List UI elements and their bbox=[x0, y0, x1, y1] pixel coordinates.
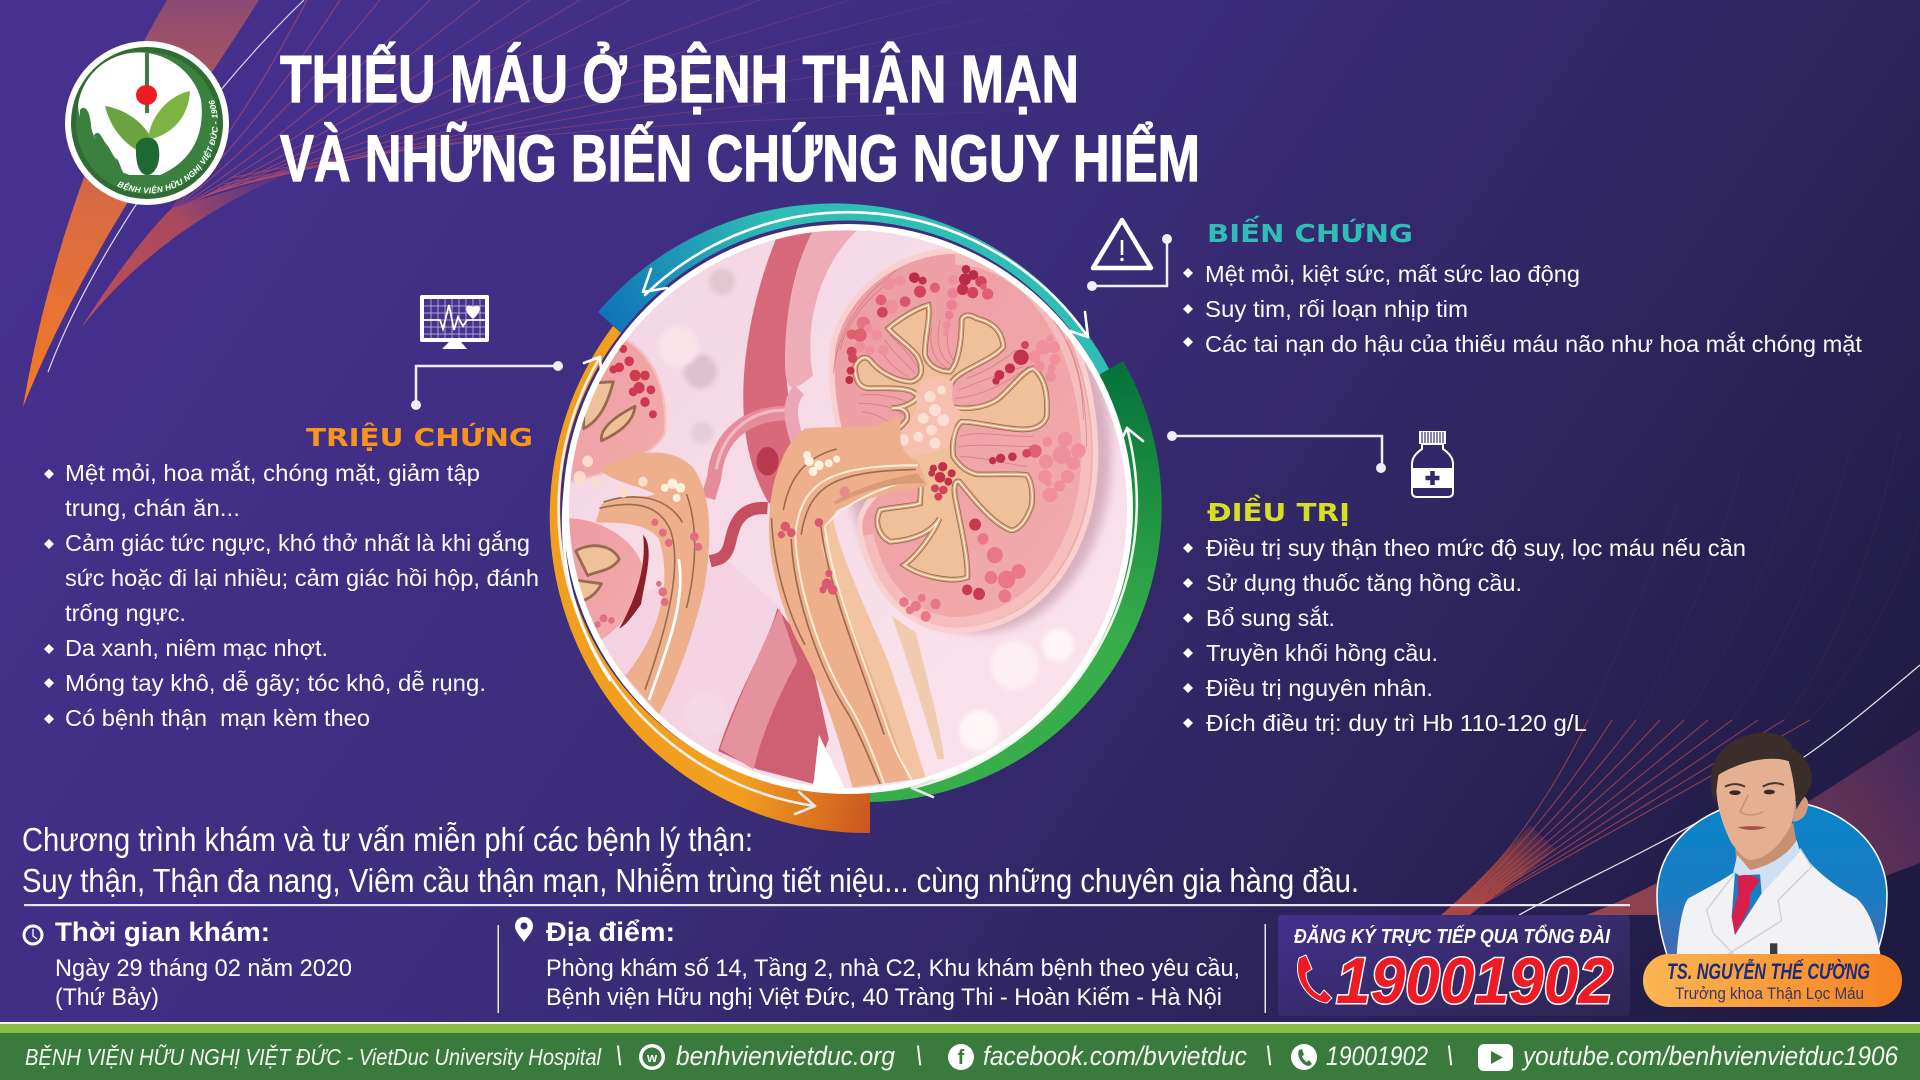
treatment list: Bổ sung sắt. bbox=[1206, 605, 1335, 631]
heading: treatment: ĐIỀU TRỊ bbox=[1207, 494, 1350, 527]
hospital logo bbox=[65, 41, 229, 205]
treatment list: Điều trị nguyên nhân. bbox=[1206, 675, 1433, 701]
title: VÀ NHỮNG BIẾN CHỨNG NGUY HIỂM bbox=[280, 121, 1200, 195]
decorative swooshes bottom right bbox=[1441, 430, 1920, 915]
icon: phone bbox=[1291, 1044, 1317, 1070]
left kidney bbox=[568, 337, 665, 482]
symptom list: trung, chán ăn... bbox=[65, 495, 240, 521]
panel: location: Phòng khám số 14, Tầng 2, nhà C2, Khu khám bệnh theo yêu cầu, bbox=[546, 955, 1240, 982]
hotline number: 19001902 bbox=[1336, 944, 1613, 1017]
right kidney bbox=[848, 360, 1116, 637]
complication list: Các tai nạn do hậu của thiếu máu não như hoa mắt chóng mặt bbox=[1205, 331, 1862, 357]
program announcement text: Chương trình khám và tư vấn miễn phí các bệnh lý thận: bbox=[22, 821, 753, 858]
panel: complications bbox=[1087, 215, 1862, 357]
icon: facebook: f bbox=[958, 1047, 965, 1069]
icon: clock bbox=[22, 924, 44, 946]
footer bar: 19001902 bbox=[1326, 1041, 1428, 1071]
symptom list: Cảm giác tức ngực, khó thở nhất là khi gắng bbox=[65, 530, 530, 556]
footer bar: \ bbox=[1265, 1041, 1273, 1071]
symptom list: sức hoặc đi lại nhiều; cảm giác hồi hộp, đánh bbox=[65, 565, 539, 591]
icon: website bbox=[639, 1044, 665, 1070]
central kidney illustration bbox=[560, 220, 1140, 800]
symptom list: Có bệnh thận mạn kèm theo bbox=[65, 705, 370, 731]
heading: complications: BIẾN CHỨNG bbox=[1207, 215, 1413, 248]
doctor portrait bbox=[1657, 733, 1887, 958]
symptom list: Mệt mỏi, hoa mắt, chóng mặt, giảm tập bbox=[65, 460, 480, 486]
treatment list: Đích điều trị: duy trì Hb 110-120 g/L bbox=[1206, 710, 1587, 736]
footer bar: benhvienvietduc.org bbox=[676, 1041, 895, 1071]
symptom list bbox=[44, 460, 539, 731]
doctor name badge bbox=[1643, 954, 1902, 1007]
panel: location: Bệnh viện Hữu nghị Việt Đức, 40 Tràng Thi - Hoàn Kiếm - Hà Nội bbox=[546, 984, 1222, 1011]
symptom list: trống ngực. bbox=[65, 600, 186, 626]
panel: symptoms bbox=[44, 295, 563, 731]
icon: red phone bbox=[1297, 955, 1332, 1003]
symptom list: Da xanh, niêm mạc nhợt. bbox=[65, 635, 328, 661]
title: THIẾU MÁU Ở BỆNH THẬN MẠN bbox=[280, 42, 1079, 117]
panel: exam time bbox=[22, 917, 352, 1011]
complication list: Mệt mỏi, kiệt sức, mất sức lao động bbox=[1205, 261, 1580, 287]
footer bar: \ bbox=[1446, 1041, 1454, 1071]
lower kidney clusters bbox=[899, 518, 1026, 622]
program announcement text bbox=[22, 821, 1359, 899]
treatment list bbox=[1183, 535, 1746, 736]
panel: location: Địa điểm: bbox=[546, 917, 675, 947]
vessels bbox=[743, 231, 813, 504]
title bbox=[280, 42, 1200, 195]
registration hotline box: ĐĂNG KÝ TRỰC TIẾP QUA TỔNG ĐÀI bbox=[1294, 924, 1610, 948]
doctor name badge: Trưởng khoa Thận Lọc Máu bbox=[1675, 984, 1864, 1003]
icon: heart monitor bbox=[420, 295, 489, 349]
icon: facebook bbox=[948, 1044, 974, 1070]
treatment list: Truyền khối hồng cầu. bbox=[1206, 640, 1438, 666]
connector bbox=[1167, 431, 1386, 473]
logo ring text: BỆNH VIỆN HỮU NGHỊ VIỆT ĐỨC - 1906 bbox=[117, 100, 218, 194]
complication list bbox=[1183, 261, 1862, 357]
panel: treatment bbox=[1167, 431, 1746, 736]
icon: medicine bottle bbox=[1412, 431, 1453, 497]
panel: exam time: (Thứ Bảy) bbox=[55, 984, 159, 1011]
icon: youtube bbox=[1478, 1044, 1513, 1071]
icon: map pin bbox=[515, 917, 533, 942]
footer bar: \ bbox=[915, 1041, 923, 1071]
treatment list: Điều trị suy thận theo mức độ suy, lọc máu nếu cần bbox=[1206, 535, 1746, 561]
circular arcs: complication, treatment, symptoms bbox=[550, 203, 1162, 833]
treatment list: Sử dụng thuốc tăng hồng cầu. bbox=[1206, 570, 1522, 596]
footer bar: facebook.com/bvvietduc bbox=[983, 1041, 1247, 1071]
panel: exam time: Ngày 29 tháng 02 năm 2020 bbox=[55, 955, 352, 982]
footer bar: BỆNH VIỆN HỮU NGHỊ VIỆT ĐỨC - VietDuc University Hospital bbox=[25, 1043, 602, 1070]
kidney calyces traced at 3x bbox=[833, 265, 1087, 580]
program announcement text: Suy thận, Thận đa nang, Viêm cầu thận mạn, Nhiễm trùng tiết niệu... cùng những chuyên gia hàng đầu. bbox=[22, 862, 1359, 899]
connector bbox=[411, 361, 563, 410]
decorative swooshes top left bbox=[23, 0, 1100, 407]
panel: exam time: Thời gian khám: bbox=[55, 917, 270, 947]
heading: symptoms: TRIỆU CHỨNG bbox=[306, 422, 533, 452]
footer bar: \ bbox=[615, 1041, 623, 1071]
right ureter bbox=[769, 416, 928, 788]
connector bbox=[1087, 234, 1172, 291]
icon: website: w bbox=[646, 1050, 658, 1065]
footer bar bbox=[0, 1022, 1920, 1080]
symptom list: Móng tay khô, dễ gãy; tóc khô, dễ rụng. bbox=[65, 670, 486, 696]
panel: location bbox=[515, 917, 1240, 1011]
complication list: Suy tim, rối loạn nhịp tim bbox=[1205, 296, 1468, 322]
icon: warning triangle bbox=[1093, 220, 1151, 268]
registration hotline box bbox=[1278, 915, 1630, 1017]
